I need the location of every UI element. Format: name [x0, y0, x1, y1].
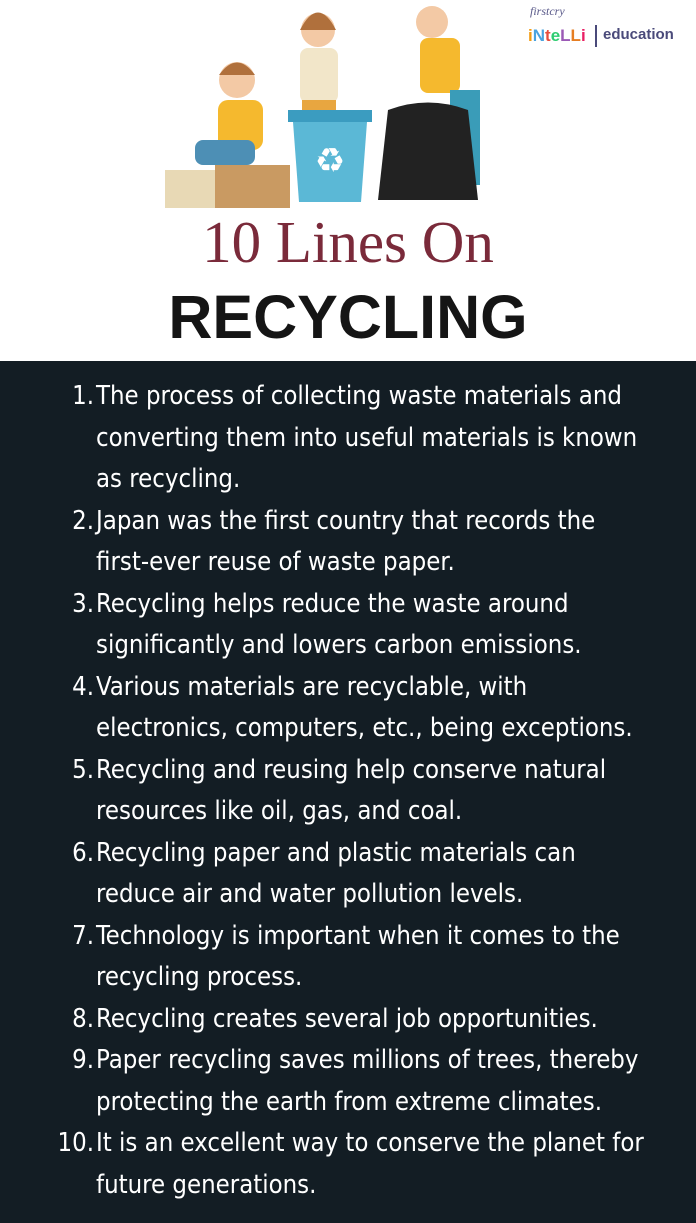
item 10 — [58, 1128, 644, 1200]
logo: firstcry — [530, 4, 565, 18]
item 6: 6. — [72, 838, 94, 868]
item 7: recycling process. — [96, 962, 302, 992]
title line 2: RECYCLING — [168, 283, 528, 351]
item 10: 10. — [58, 1128, 94, 1158]
item 2: 2. — [72, 506, 94, 536]
item 2 — [72, 506, 595, 577]
recycling bin — [288, 110, 372, 202]
item 3: significantly and lowers carbon emissions. — [96, 630, 582, 660]
item 1: converting them into useful materials is known — [96, 422, 637, 452]
item 5: Recycling and reusing help conserve natural — [96, 754, 606, 784]
boxes — [165, 165, 290, 208]
item 9: protecting the earth from extreme climates. — [96, 1086, 602, 1116]
item 7: Technology is important when it comes to the — [96, 920, 620, 950]
item 2: Japan was the first country that records the — [96, 506, 595, 536]
black bag — [378, 102, 478, 200]
item 8: 8. — [72, 1004, 94, 1034]
kid left — [195, 62, 263, 165]
item 1 — [72, 381, 637, 494]
panel: ten lines — [0, 361, 696, 1223]
item 9 — [72, 1045, 638, 1116]
illustration: kids recycling — [165, 6, 480, 208]
logo: iNteLLi — [528, 26, 586, 45]
item 5: 5. — [72, 754, 94, 784]
item 7: 7. — [72, 920, 94, 950]
item 8: Recycling creates several job opportunities. — [96, 1004, 598, 1034]
item 4: electronics, computers, etc., being exceptions. — [96, 713, 633, 743]
item 6: Recycling paper and plastic materials can — [96, 838, 576, 868]
item 6: reduce air and water pollution levels. — [96, 879, 523, 909]
item 3 — [72, 588, 582, 660]
item 5 — [72, 754, 606, 826]
item 3: Recycling helps reduce the waste around — [96, 588, 569, 618]
item 7 — [72, 920, 620, 992]
kid right — [416, 6, 480, 185]
logo — [528, 4, 674, 47]
kid middle — [300, 12, 338, 180]
item 4: Various materials are recyclable, with — [96, 672, 527, 702]
item 1: 1. — [72, 381, 94, 411]
item 10: future generations. — [96, 1170, 316, 1200]
item 1: The process of collecting waste materials and — [96, 381, 622, 411]
recycling bin: ♻ — [315, 142, 345, 180]
item 4 — [72, 672, 633, 743]
item 6 — [72, 838, 576, 909]
item 3: 3. — [72, 588, 94, 618]
item 10: It is an excellent way to conserve the planet for — [96, 1128, 644, 1158]
item 4: 4. — [72, 672, 94, 702]
logo: education — [603, 26, 674, 43]
item 2: first-ever reuse of waste paper. — [96, 547, 455, 577]
header area — [0, 0, 696, 361]
item 9: 9. — [72, 1045, 94, 1075]
item 5: resources like oil, gas, and coal. — [96, 796, 462, 826]
item 9: Paper recycling saves millions of trees, thereby — [96, 1045, 638, 1075]
item 1: as recycling. — [96, 464, 240, 494]
title line 1: 10 Lines On — [202, 209, 494, 275]
